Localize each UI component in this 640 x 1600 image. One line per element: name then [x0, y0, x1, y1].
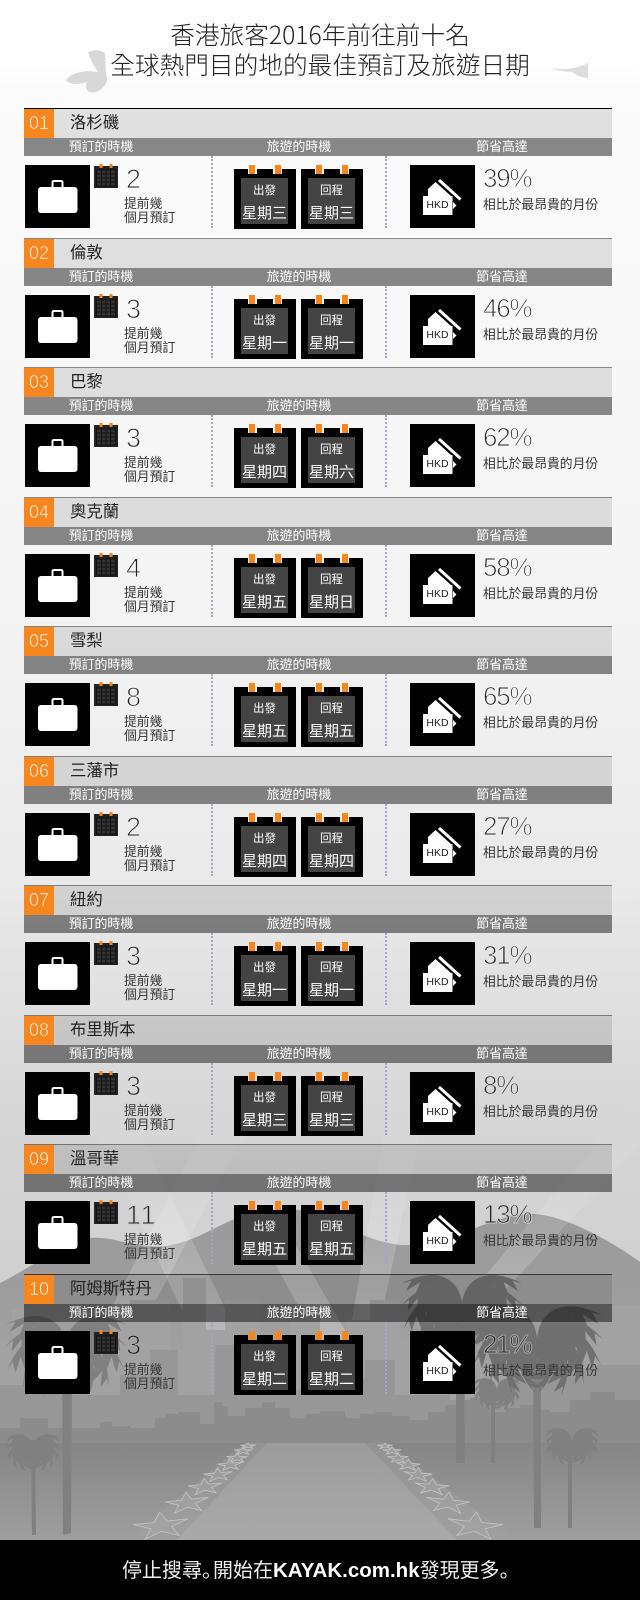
savings caption: 相比於最昂貴的月份 [483, 974, 598, 989]
return card: 回程 [320, 833, 343, 845]
rank number: 06 [29, 761, 49, 781]
months caption [124, 714, 175, 743]
departure card: 星期三 [242, 1112, 287, 1129]
city name: 奧克蘭 [70, 503, 119, 521]
return card: 回程 [320, 962, 343, 974]
return card [301, 295, 363, 359]
column headings: 節省高達 [476, 657, 528, 672]
months caption: 提前幾 [124, 196, 162, 211]
savings percent: 8% [483, 1070, 518, 1100]
top rule [24, 238, 612, 239]
rank number: 03 [29, 372, 49, 392]
city name: 巴黎 [70, 373, 103, 391]
months caption: 個月預訂 [124, 1246, 175, 1261]
return card: 星期三 [309, 1112, 354, 1129]
name band [24, 368, 612, 397]
icon: suitcase [25, 683, 90, 746]
return card: 回程 [320, 315, 343, 327]
title: 全球熱門目的地的最佳預訂及旅遊日期 [110, 53, 530, 80]
spotlights [55, 1040, 640, 1400]
panel: destination 02 [24, 238, 612, 359]
departure card: 星期五 [242, 594, 287, 611]
column headings [24, 1045, 612, 1063]
divider left [211, 286, 213, 358]
icon: HKD card [410, 165, 475, 228]
divider left [211, 1063, 213, 1135]
return card: 回程 [320, 1221, 343, 1233]
divider left [211, 933, 213, 1005]
column headings [24, 527, 612, 545]
savings caption: 相比於最昂貴的月份 [483, 845, 598, 860]
months caption: 個月預訂 [124, 469, 175, 484]
icon: suitcase [25, 1201, 90, 1264]
rank number [24, 1275, 54, 1304]
divider left [211, 415, 213, 487]
departure card: 星期四 [242, 853, 287, 870]
months number: 3 [126, 941, 142, 971]
savings percent: 58% [483, 552, 531, 582]
butterfly right [551, 63, 588, 78]
return card [301, 165, 363, 229]
return card: 回程 [320, 574, 343, 586]
departure card: 出發 [253, 962, 276, 974]
icon: HKD card [410, 942, 475, 1005]
months caption [124, 585, 175, 614]
return card [301, 683, 363, 747]
column headings: 旅遊的時機 [267, 787, 331, 802]
column headings [24, 268, 612, 286]
stars [132, 1443, 504, 1540]
column headings: 節省高達 [476, 1175, 528, 1190]
savings percent: 46% [483, 293, 531, 323]
divider right [385, 674, 387, 746]
divider left [211, 156, 213, 228]
months number: 3 [126, 294, 142, 324]
column headings: 節省高達 [476, 916, 528, 931]
savings percent: 65% [483, 681, 531, 711]
top rule [24, 367, 612, 368]
months number: 11 [126, 1200, 157, 1230]
icon: suitcase [25, 554, 90, 617]
column headings [24, 656, 612, 674]
column headings [24, 1304, 612, 1322]
icon: HKD card: HKD [426, 588, 449, 600]
departure card [234, 165, 296, 229]
months caption [124, 1363, 175, 1391]
panel: destination 03 [24, 367, 612, 488]
name band [24, 498, 612, 527]
return card: 回程 [320, 1092, 343, 1104]
departure card: 星期一 [242, 982, 287, 999]
column headings: 預訂的時機 [69, 1046, 133, 1061]
divider right [385, 1192, 387, 1264]
panel: destination 08 [24, 1015, 612, 1136]
city name: 溫哥華 [70, 1150, 119, 1168]
divider left [211, 545, 213, 617]
icon: HKD card: HKD [426, 329, 449, 341]
top rule [24, 1274, 612, 1275]
top rule [24, 756, 612, 757]
name band [24, 1275, 612, 1304]
icon: HKD card: HKD [426, 717, 449, 729]
icon: calendar [94, 164, 118, 188]
column headings: 旅遊的時機 [267, 657, 331, 672]
column headings [24, 1174, 612, 1192]
rank number [24, 627, 54, 656]
top rule [24, 1144, 612, 1145]
savings percent: 62% [483, 422, 531, 452]
return card: 星期六 [309, 464, 354, 481]
hills [0, 1209, 640, 1540]
months caption: 提前幾 [124, 326, 162, 341]
column headings: 旅遊的時機 [267, 1305, 331, 1320]
months caption: 個月預訂 [124, 1376, 175, 1391]
icon: HKD card: HKD [426, 847, 449, 859]
name band [24, 886, 612, 915]
column headings: 預訂的時機 [69, 398, 133, 413]
name band [24, 109, 612, 138]
column headings: 預訂的時機 [69, 269, 133, 284]
months number: 3 [126, 1071, 142, 1101]
column headings: 旅遊的時機 [267, 1046, 331, 1061]
savings caption: 相比於最昂貴的月份 [483, 1363, 598, 1378]
column headings: 旅遊的時機 [267, 1175, 331, 1190]
divider right [385, 1063, 387, 1135]
rank number [24, 109, 54, 138]
divider right [385, 804, 387, 876]
departure card [234, 813, 296, 877]
ground [0, 1443, 640, 1540]
return card: 星期日 [309, 594, 354, 611]
column headings [24, 915, 612, 933]
top rule [24, 626, 612, 627]
top rule [24, 885, 612, 886]
months number: 4 [126, 553, 142, 583]
months caption [124, 196, 175, 225]
return card: 星期一 [309, 335, 354, 352]
panel: destination 04 [24, 497, 612, 618]
icon: HKD card: HKD [426, 1235, 449, 1247]
departure card: 出發 [253, 833, 276, 845]
departure card [234, 1331, 296, 1396]
column headings: 節省高達 [476, 528, 528, 543]
icon: suitcase [25, 1072, 90, 1135]
name band [24, 239, 612, 268]
icon: HKD card [410, 554, 475, 617]
icon: HKD card: HKD [426, 1365, 449, 1377]
rank number [24, 239, 54, 268]
top rule [24, 497, 612, 498]
return card [301, 1072, 363, 1137]
departure card: 出發 [253, 315, 276, 327]
divider left [211, 674, 213, 746]
column headings [24, 138, 612, 156]
departure card [234, 554, 296, 618]
rank number [24, 886, 54, 915]
months number: 2 [126, 164, 142, 194]
column headings: 旅遊的時機 [267, 528, 331, 543]
months caption [124, 1103, 175, 1132]
divider left [211, 804, 213, 876]
months number: 2 [126, 812, 142, 842]
rank number: 04 [29, 502, 49, 522]
departure card [234, 1201, 296, 1266]
savings caption: 相比於最昂貴的月份 [483, 456, 598, 471]
departure card: 星期三 [242, 205, 287, 222]
icon: HKD card [410, 1072, 475, 1135]
savings percent: 21% [483, 1329, 531, 1359]
rank number: 05 [29, 631, 49, 651]
departure card: 出發 [253, 574, 276, 586]
rank number: 01 [29, 113, 49, 133]
title: 香港旅客2016年前往前十名 [170, 16, 470, 52]
months caption [124, 973, 175, 1002]
return card: 星期二 [309, 1371, 354, 1388]
icon: HKD card: HKD [426, 976, 449, 988]
name band [24, 757, 612, 786]
icon: suitcase [25, 165, 90, 228]
months caption: 個月預訂 [124, 858, 175, 873]
divider right [385, 545, 387, 617]
divider right [385, 1322, 387, 1394]
butterfly left [66, 50, 107, 92]
return card [301, 424, 363, 488]
divider right [385, 286, 387, 358]
top rule [24, 1015, 612, 1016]
departure card [234, 683, 296, 747]
column headings: 節省高達 [476, 398, 528, 413]
column headings: 預訂的時機 [69, 787, 133, 802]
icon: suitcase [25, 813, 90, 876]
panel: destination 09 [0, 1144, 640, 1269]
departure card: 出發 [253, 1351, 276, 1363]
rank number [24, 1016, 54, 1045]
savings caption: 相比於最昂貴的月份 [483, 197, 598, 212]
column headings: 旅遊的時機 [267, 916, 331, 931]
panel: destination 01 [24, 108, 612, 229]
months caption: 提前幾 [124, 1103, 162, 1118]
months caption: 提前幾 [124, 1362, 162, 1377]
name band [24, 1016, 612, 1045]
divider left [211, 1192, 213, 1264]
name band [24, 1145, 612, 1174]
icon: calendar [94, 1330, 118, 1356]
return card: 回程 [320, 444, 343, 456]
city name: 洛杉磯 [70, 114, 119, 132]
months caption [124, 844, 175, 873]
panel: destination 06 [24, 756, 612, 877]
departure card: 星期五 [242, 1241, 287, 1258]
savings caption: 相比於最昂貴的月份 [483, 1233, 598, 1248]
panel: destination 05 [24, 626, 612, 747]
column headings: 節省高達 [476, 1305, 528, 1320]
months caption: 個月預訂 [124, 210, 175, 225]
city name: 雪梨 [70, 632, 103, 650]
savings caption: 相比於最昂貴的月份 [483, 586, 598, 601]
rank number: 09 [29, 1149, 49, 1169]
front skyline [0, 1392, 640, 1540]
months caption [124, 1233, 175, 1261]
months caption: 個月預訂 [124, 1117, 175, 1132]
months caption: 提前幾 [124, 455, 162, 470]
city name: 布里斯本 [70, 1021, 136, 1039]
departure card [234, 1072, 296, 1136]
rank number: 10 [29, 1279, 49, 1299]
return card: 星期五 [309, 723, 354, 740]
rank number [24, 1145, 54, 1174]
return card: 回程 [320, 703, 343, 715]
footer call to action [0, 1540, 640, 1600]
months caption: 提前幾 [124, 1232, 162, 1247]
months caption: 提前幾 [124, 973, 162, 988]
icon: suitcase [25, 295, 90, 358]
departure card: 出發 [253, 1221, 276, 1233]
savings caption: 相比於最昂貴的月份 [483, 715, 598, 730]
return card [301, 554, 363, 618]
rank number: 07 [29, 890, 49, 910]
return card: 星期四 [309, 853, 354, 870]
months number: 3 [126, 1330, 142, 1360]
icon: HKD card [410, 295, 475, 358]
departure card: 星期二 [242, 1371, 287, 1388]
months caption: 個月預訂 [124, 340, 175, 355]
months caption: 提前幾 [124, 844, 162, 859]
months number: 3 [126, 423, 142, 453]
icon: HKD card: HKD [426, 1106, 449, 1118]
return card [301, 1201, 363, 1266]
divider right [385, 415, 387, 487]
column headings: 預訂的時機 [69, 1305, 133, 1320]
icon: calendar [94, 682, 118, 706]
column headings: 旅遊的時機 [267, 398, 331, 413]
departure card [234, 942, 296, 1006]
departure card: 星期四 [242, 464, 287, 481]
column headings: 旅遊的時機 [267, 269, 331, 284]
panel: destination 07 [24, 885, 612, 1006]
departure card: 出發 [253, 1092, 276, 1104]
departure card: 出發 [253, 703, 276, 715]
savings percent: 39% [483, 163, 531, 193]
icon: HKD card [410, 683, 475, 746]
icon: calendar [94, 423, 118, 447]
column headings: 節省高達 [476, 1046, 528, 1061]
icon: suitcase [25, 942, 90, 1005]
icon: calendar [94, 941, 118, 965]
return card: 回程 [320, 1351, 343, 1363]
savings percent: 13% [483, 1199, 531, 1229]
footer call to action: 停止搜尋。開始在KAYAK.com.hk發現更多。 [122, 1554, 520, 1583]
divider right [385, 933, 387, 1005]
column headings: 預訂的時機 [69, 139, 133, 154]
return card: 星期五 [309, 1241, 354, 1258]
savings caption: 相比於最昂貴的月份 [483, 1104, 598, 1119]
months caption [124, 455, 175, 484]
departure card: 出發 [253, 185, 276, 197]
departure card: 星期五 [242, 723, 287, 740]
return card: 星期一 [309, 982, 354, 999]
icon: suitcase [25, 424, 90, 487]
column headings: 預訂的時機 [69, 916, 133, 931]
name band [24, 627, 612, 656]
column headings: 預訂的時機 [69, 657, 133, 672]
return card [301, 1331, 363, 1396]
months caption [124, 326, 175, 355]
return card [301, 813, 363, 877]
palm trees [3, 1259, 605, 1535]
departure card [234, 295, 296, 359]
rank number [24, 368, 54, 397]
divider left [211, 1322, 213, 1394]
icon: calendar [94, 553, 118, 577]
icon: calendar [94, 1071, 118, 1095]
icon: suitcase [25, 1331, 90, 1394]
months caption: 個月預訂 [124, 728, 175, 743]
months caption: 提前幾 [124, 714, 162, 729]
months caption: 提前幾 [124, 585, 162, 600]
icon: HKD card [410, 424, 475, 487]
return card: 星期三 [309, 205, 354, 222]
icon: HKD card [410, 1201, 475, 1264]
column headings: 預訂的時機 [69, 528, 133, 543]
months number: 8 [126, 682, 142, 712]
rank number [24, 498, 54, 527]
city name: 倫敦 [70, 244, 103, 262]
rank number [24, 757, 54, 786]
departure card: 星期一 [242, 335, 287, 352]
column headings: 預訂的時機 [69, 1175, 133, 1190]
savings percent: 31% [483, 940, 531, 970]
rank number: 08 [29, 1020, 49, 1040]
icon: HKD card: HKD [426, 199, 449, 211]
city name: 阿姆斯特丹 [70, 1280, 152, 1298]
icon: calendar [94, 812, 118, 836]
panel: destination 10 [0, 1274, 640, 1399]
icon: HKD card [410, 813, 475, 876]
savings percent: 27% [483, 811, 531, 841]
departure card: 出發 [253, 444, 276, 456]
column headings: 節省高達 [476, 787, 528, 802]
icon: HKD card [410, 1331, 475, 1394]
savings caption: 相比於最昂貴的月份 [483, 327, 598, 342]
city name: 紐約 [70, 891, 103, 909]
rank number: 02 [29, 243, 49, 263]
column headings: 旅遊的時機 [267, 139, 331, 154]
column headings [24, 397, 612, 415]
icon: calendar [94, 1200, 118, 1226]
months caption: 個月預訂 [124, 599, 175, 614]
divider right [385, 156, 387, 228]
icon: HKD card: HKD [426, 458, 449, 470]
return card [301, 942, 363, 1006]
icon: calendar [94, 294, 118, 318]
city name: 三藩市 [70, 762, 119, 780]
back skyline [0, 1278, 640, 1540]
top rule [24, 108, 612, 109]
months caption: 個月預訂 [124, 987, 175, 1002]
road [177, 1443, 457, 1540]
title [110, 16, 530, 80]
column headings [24, 786, 612, 804]
walkway [132, 1443, 510, 1536]
departure card [234, 424, 296, 488]
column headings: 節省高達 [476, 269, 528, 284]
column headings: 節省高達 [476, 139, 528, 154]
return card: 回程 [320, 185, 343, 197]
